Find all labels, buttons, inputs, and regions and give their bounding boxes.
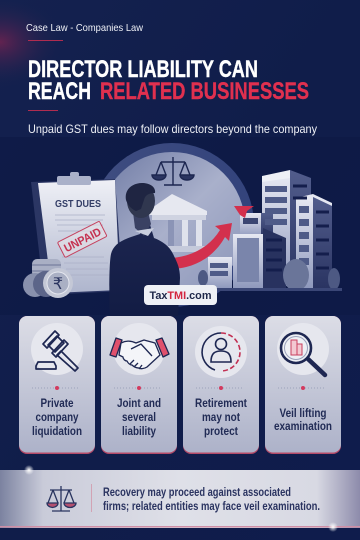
card: retirement may not protect: [183, 316, 259, 454]
card: veil lifting examination: Veil lifting: [280, 406, 326, 420]
rupee coins: ₹: [53, 276, 63, 293]
icon: balance scales: [47, 486, 76, 511]
divider dots: [32, 386, 80, 390]
bottom callout band: [0, 465, 360, 532]
TaxTMI logo badge: [144, 285, 217, 305]
icon: scales of justice: [152, 157, 194, 185]
callout text: [103, 487, 320, 513]
card: retirement may not protect: protect: [204, 424, 238, 438]
icon: courthouse: [146, 194, 208, 252]
hero illustration: [23, 143, 342, 316]
card: joint and several liability: [101, 316, 177, 454]
title: DIRECTOR LIABILITY CAN: [28, 56, 258, 83]
title: REACH: [28, 78, 91, 105]
callout text: firms; related entities may face veil examination.: [103, 501, 320, 513]
callout text: Recovery may proceed against associated: [103, 487, 291, 499]
icon: gavel: [36, 331, 78, 371]
card: veil lifting examination: examination: [274, 419, 332, 433]
card: private company liquidation: [19, 316, 95, 454]
card: private company liquidation: company: [36, 410, 79, 424]
card: private company liquidation: liquidation: [32, 424, 82, 438]
card: retirement may not protect: may not: [202, 410, 240, 424]
card: joint and several liability: Joint and: [117, 396, 161, 410]
clipboard with GST DUES document: GST DUES: [55, 198, 101, 210]
icon: handshake: [110, 338, 169, 369]
subtitle: Unpaid GST dues may follow directors beyond the company: [28, 122, 317, 136]
red growth arrow: [172, 223, 232, 269]
stamp: UNPAID: UNPAID: [62, 226, 103, 255]
card: joint and several liability: liability: [122, 424, 156, 438]
title: [28, 56, 309, 105]
icon: magnifier over building: [281, 333, 325, 375]
card: joint and several liability: several: [122, 410, 156, 424]
icon: person in dashed ring: [202, 333, 240, 371]
building windows: [210, 186, 309, 282]
office buildings: [190, 170, 342, 291]
card: retirement may not protect: Retirement: [195, 396, 247, 410]
clipboard with GST DUES document: [31, 172, 123, 295]
court disc with scales: [90, 143, 254, 307]
TaxTMI logo badge: TaxTMI.com: [150, 290, 212, 302]
card: private company liquidation: Private: [40, 396, 74, 410]
card: veil lifting examination: [265, 316, 341, 454]
rupee coins: [23, 259, 73, 298]
eyebrow label: Case Law - Companies Law: [26, 22, 143, 34]
man in suit seen from behind: [109, 183, 180, 316]
